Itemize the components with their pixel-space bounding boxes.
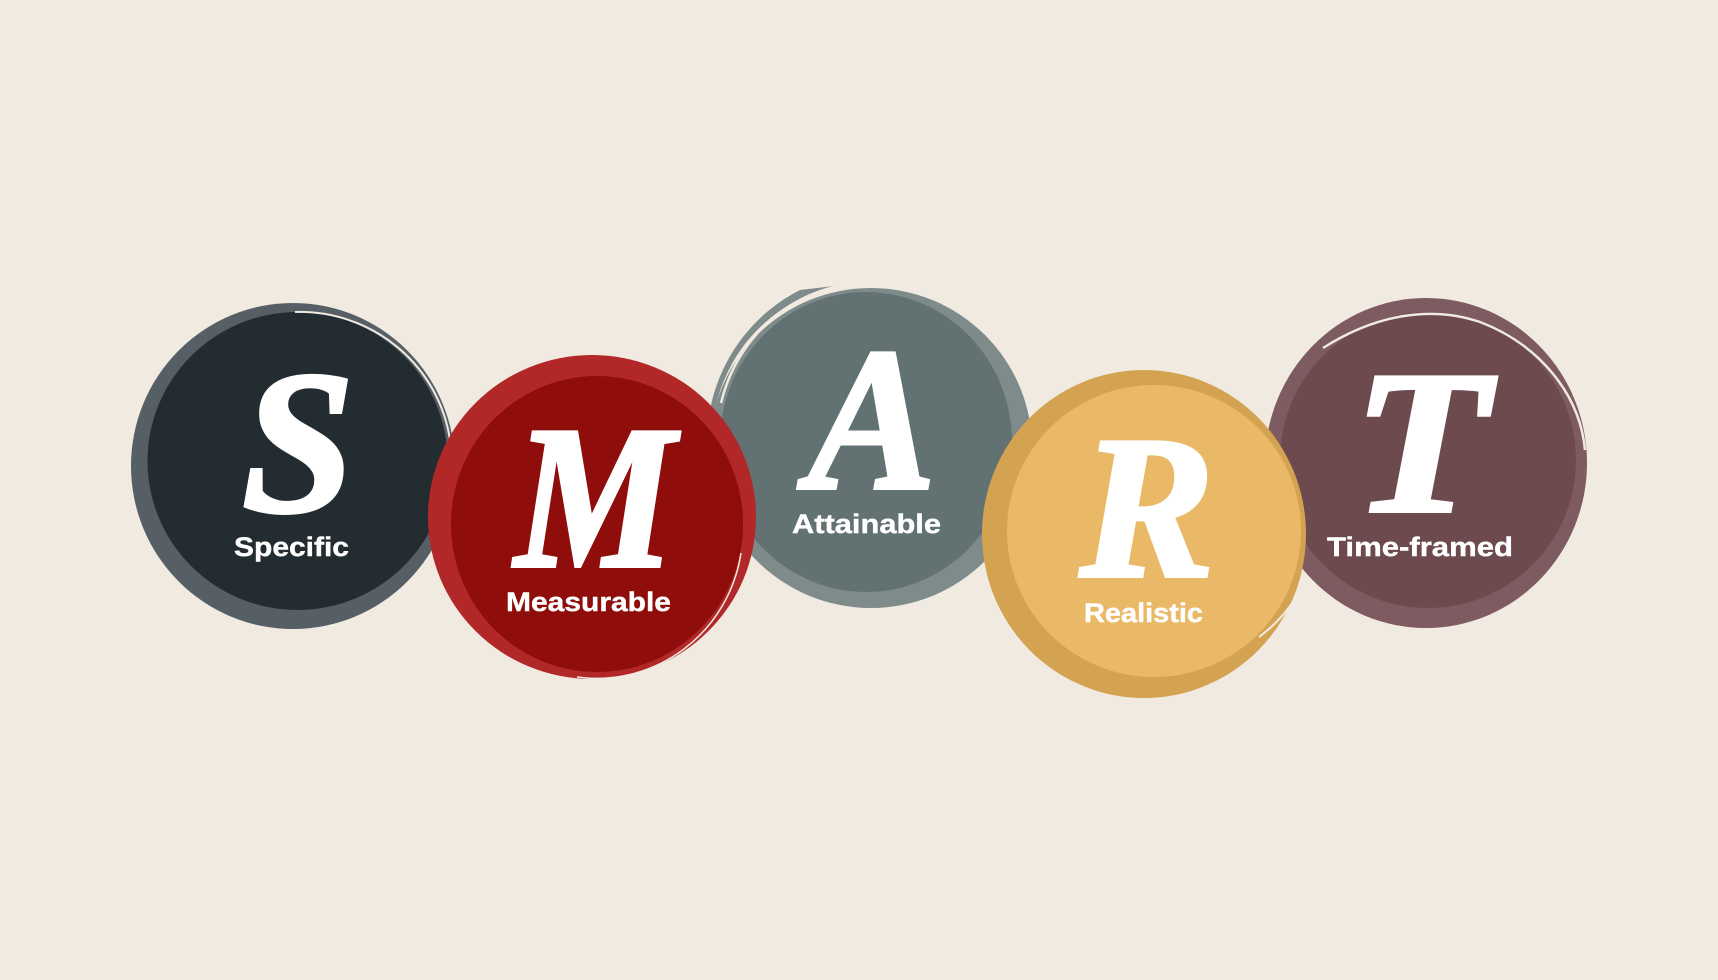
panel: Measurable	[428, 355, 756, 679]
letter T: T	[1353, 330, 1497, 556]
panel: Attainable	[710, 283, 1032, 608]
label: Realistic: Realistic	[1084, 598, 1203, 628]
panel: Time-framed	[1265, 298, 1587, 628]
panel: Realistic	[982, 370, 1306, 698]
label: Measurable: Measurable	[506, 587, 671, 617]
letter M: M	[512, 384, 680, 611]
letter A: A	[797, 307, 936, 532]
label: Time-framed: Time-framed	[1327, 532, 1513, 562]
letter S: S	[242, 329, 354, 555]
letter R: R	[1079, 394, 1215, 620]
label: Specific: Specific	[234, 532, 349, 562]
label: Attainable: Attainable	[792, 509, 941, 539]
panel: Specific	[131, 303, 455, 629]
